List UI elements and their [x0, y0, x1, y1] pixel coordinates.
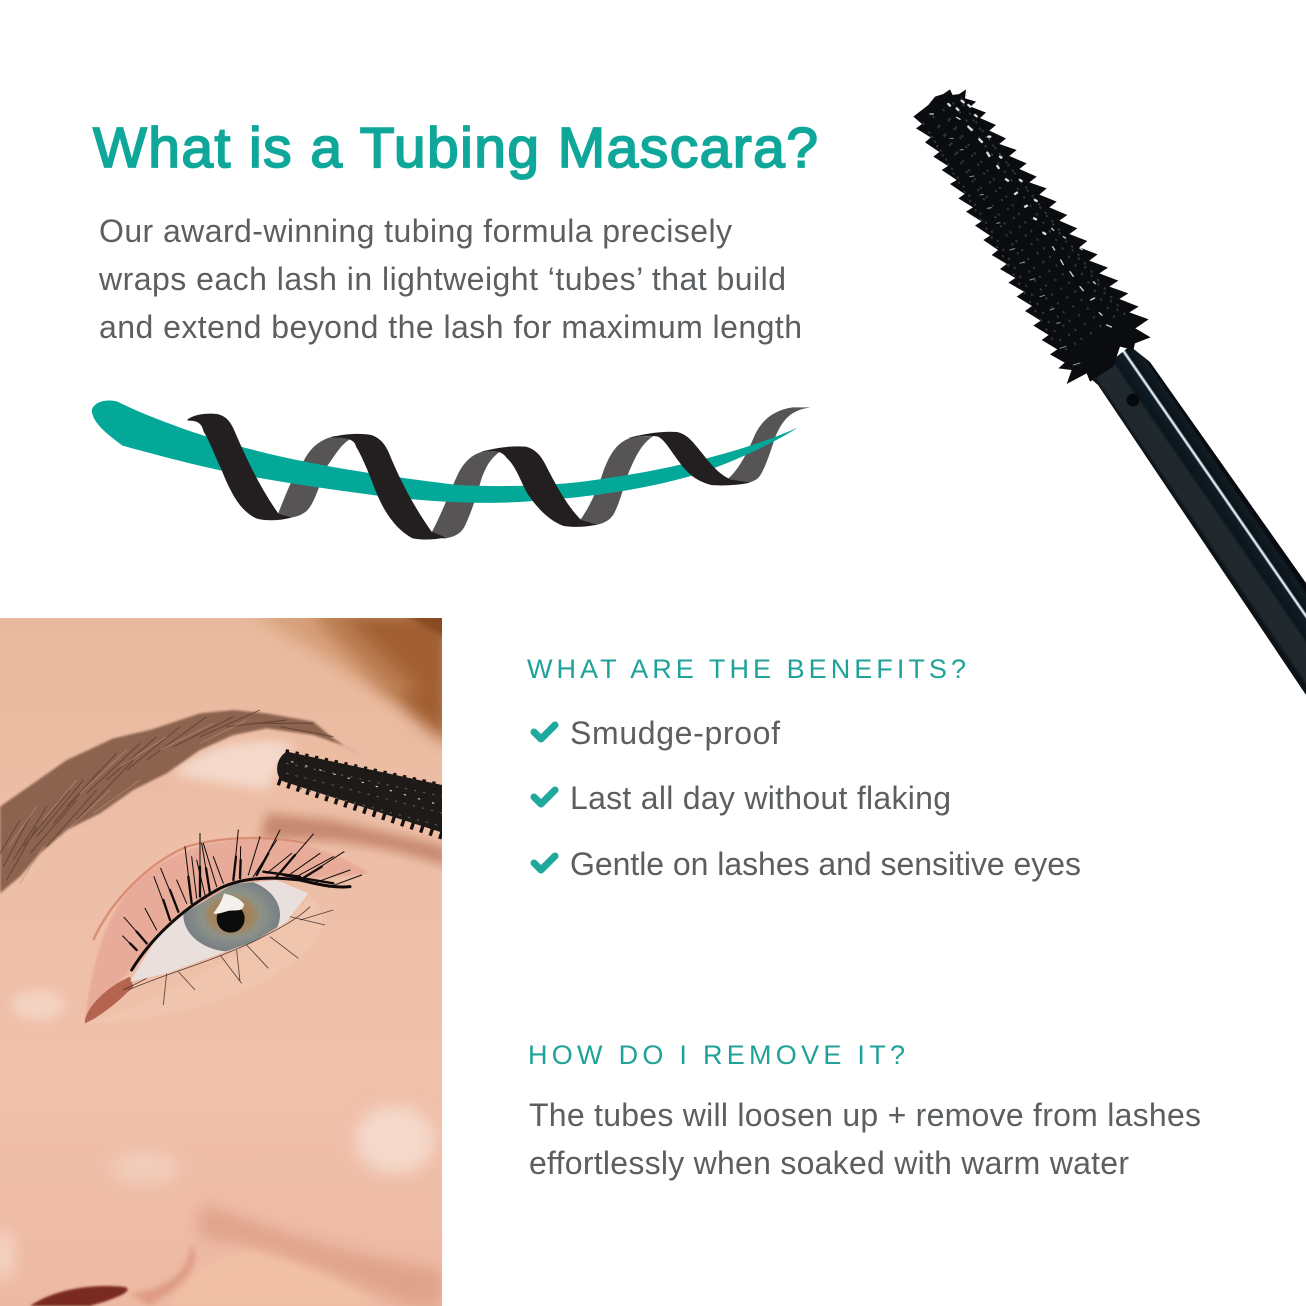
photo: eye being coated with mascara	[0, 610, 450, 1306]
removal paragraph	[529, 1097, 1201, 1181]
inner corner highlight	[12, 990, 65, 1020]
intro paragraph: wraps each lash in lightweight ‘tubes’ that build	[98, 261, 786, 297]
benefit: gentle: Gentle on lashes and sensitive eyes	[570, 846, 1081, 882]
cheek highlight	[0, 1106, 435, 1281]
benefit: smudge-proof: Smudge-proof	[570, 715, 780, 751]
eyelid crease	[93, 838, 307, 940]
removal paragraph: effortlessly when soaked with warm water	[529, 1145, 1129, 1181]
removal paragraph: The tubes will loosen up + remove from lashes	[529, 1097, 1201, 1133]
nose wing edge	[130, 1245, 195, 1306]
wand handle	[1090, 346, 1306, 695]
ribbon back segments	[278, 407, 811, 539]
inner eye corner	[85, 977, 133, 1023]
title: What is a Tubing Mascara?	[93, 116, 818, 180]
intro paragraph: and extend beyond the lash for maximum length	[99, 309, 802, 345]
mascara wand product	[913, 89, 1306, 695]
nostril	[30, 1286, 128, 1306]
brow highlight	[173, 741, 293, 790]
upper lashes	[123, 830, 362, 970]
wand in photo	[277, 752, 447, 836]
upper lip skin	[248, 1257, 363, 1301]
wand brush	[913, 89, 1151, 384]
brush texture	[923, 103, 1127, 350]
heading: benefits: WHAT ARE THE BENEFITS?	[527, 654, 966, 684]
eye area in zoom coordinates	[0, 710, 447, 1023]
eyelid	[85, 838, 370, 1022]
intro paragraph	[98, 213, 802, 345]
hair in top-right corner	[250, 610, 450, 745]
under-eye	[87, 897, 322, 1023]
eye white	[130, 880, 308, 982]
benefits list	[534, 715, 1081, 882]
diagram: lash wrapped in tube ribbon	[92, 400, 811, 539]
shadow beneath wand	[260, 813, 447, 867]
nose crease shadow	[199, 1205, 442, 1306]
ribbon front segments	[188, 414, 750, 539]
heading: removal: HOW DO I REMOVE IT?	[528, 1040, 905, 1070]
intro paragraph: Our award-winning tubing formula precisely	[99, 213, 732, 249]
eyebrow	[0, 710, 367, 893]
lower lashes	[123, 907, 333, 1005]
lash	[92, 400, 798, 503]
iris and pupil	[183, 878, 280, 952]
skin base	[0, 618, 442, 1306]
benefit: lasts all day: Last all day without flaking	[570, 780, 951, 816]
